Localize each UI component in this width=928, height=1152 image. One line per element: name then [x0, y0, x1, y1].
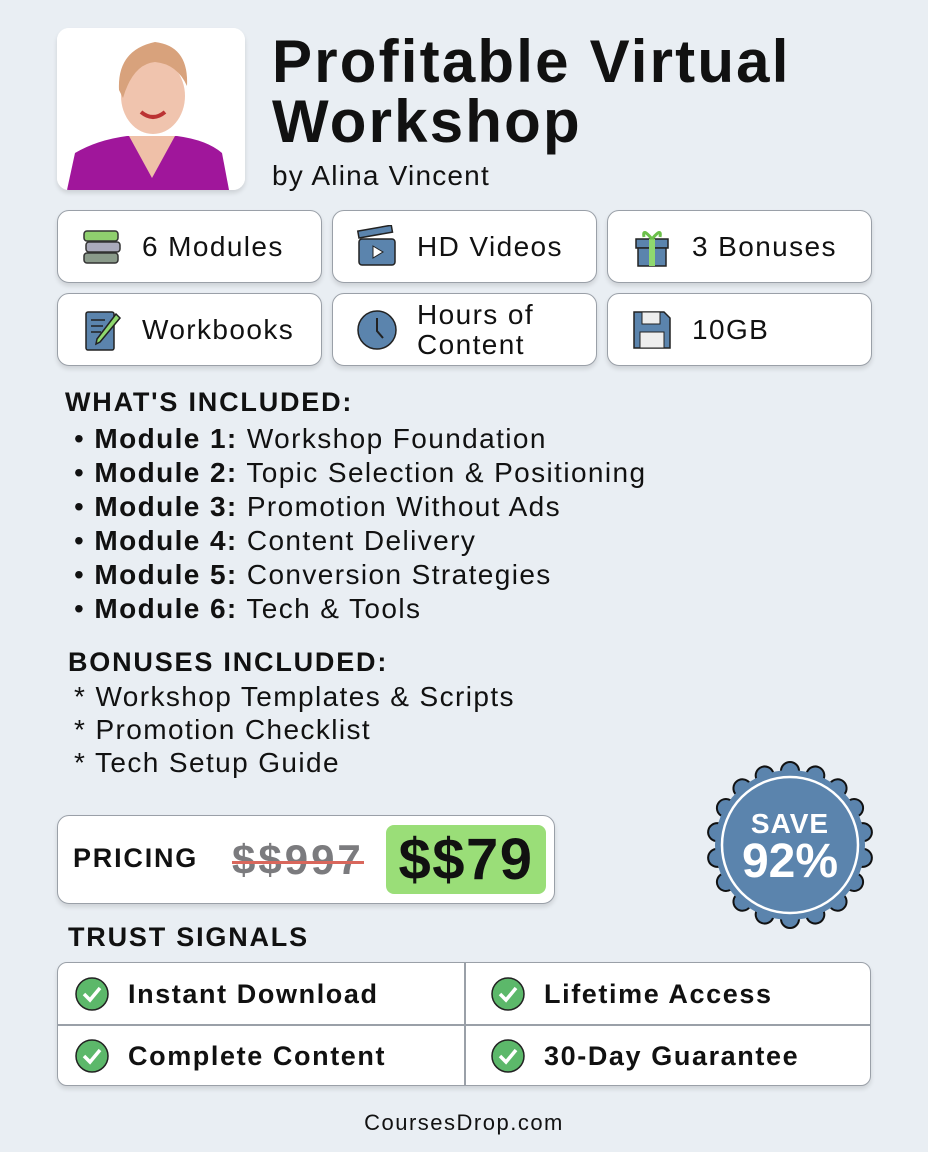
stat: size: 10GB [692, 314, 769, 344]
stat: modules: 6 Modules [142, 230, 284, 262]
pricing box [57, 815, 555, 904]
stat: modules [57, 210, 322, 283]
bonus list [74, 681, 515, 778]
title [272, 28, 791, 155]
bonus list: * Workshop Templates & Scripts [74, 681, 515, 712]
title: Profitable Virtual [272, 28, 791, 95]
stat: hours: Hours of [417, 298, 534, 330]
trust: complete content: Complete Content [128, 1040, 386, 1070]
module list: • Module 4: Content Delivery [74, 525, 476, 556]
stat: workbooks: Workbooks [142, 314, 294, 344]
trust table [57, 962, 871, 1086]
module list: • Module 6: Tech & Tools [74, 593, 421, 624]
footer: CoursesDrop.com [364, 1110, 564, 1135]
badge: save 92%: SAVE [751, 808, 829, 839]
module list: • Module 2: Topic Selection & Positioning [74, 457, 646, 488]
bonus list: * Tech Setup Guide [74, 747, 340, 778]
stat: hours: Content [417, 328, 525, 360]
stat: workbooks [57, 293, 322, 366]
new price: $$79 [398, 827, 534, 892]
trust: guarantee: 30-Day Guarantee [544, 1040, 799, 1070]
module list [74, 423, 646, 624]
heading: bonuses: BONUSES INCLUDED: [68, 647, 388, 677]
heading: what's included: WHAT'S INCLUDED: [65, 387, 353, 417]
module list: • Module 5: Conversion Strategies [74, 559, 552, 590]
photo [57, 28, 245, 190]
module list: • Module 1: Workshop Foundation [74, 423, 547, 454]
stat: size [607, 293, 872, 366]
trust: instant download: Instant Download [128, 978, 379, 1008]
stat: bonuses [607, 210, 872, 283]
badge: save 92% [707, 761, 873, 929]
author: by Alina Vincent [272, 160, 490, 191]
badge: save 92%: 92% [742, 835, 838, 888]
stat: videos [332, 210, 597, 283]
module list: • Module 3: Promotion Without Ads [74, 491, 561, 522]
stat: videos: HD Videos [417, 230, 563, 262]
heading: trust signals: TRUST SIGNALS [68, 922, 309, 952]
title: Workshop [272, 88, 582, 155]
trust: lifetime access: Lifetime Access [544, 978, 773, 1008]
stat: hours [332, 293, 597, 366]
stat: bonuses: 3 Bonuses [692, 230, 837, 262]
old price: $$997 [232, 836, 364, 883]
bonus list: * Promotion Checklist [74, 714, 371, 745]
pricing label: PRICING [73, 843, 198, 873]
